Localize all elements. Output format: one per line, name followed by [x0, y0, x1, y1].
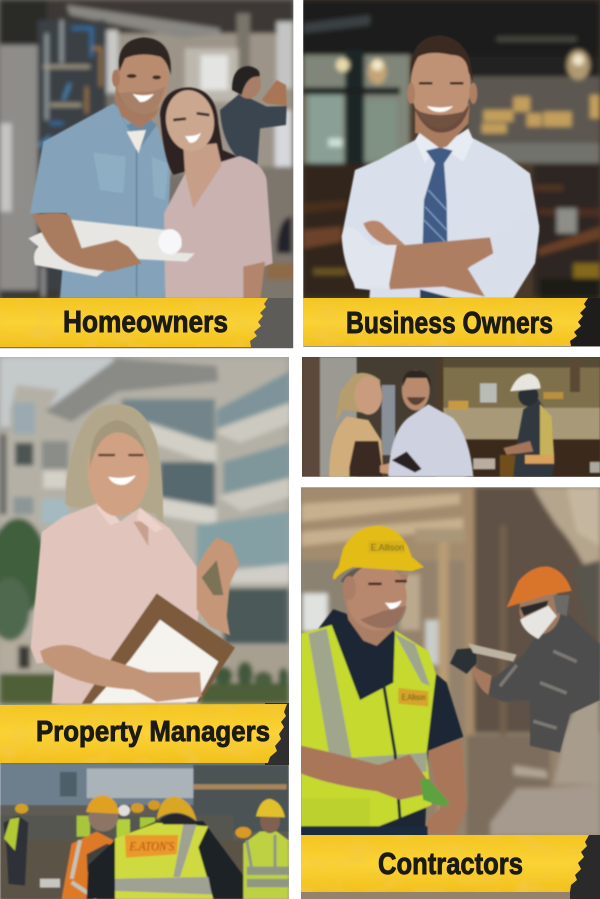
man: [30, 37, 171, 298]
label: business owners: Business Owners: [346, 305, 553, 340]
background worker: [220, 66, 287, 165]
panel backing behind property managers banner: [265, 703, 289, 765]
woman: [160, 87, 273, 298]
yellow tape shape: [0, 298, 268, 347]
panel: restaurant consultation photo: [302, 357, 600, 478]
workshop background: [0, 0, 293, 300]
apartment building background: [0, 357, 290, 704]
yellow tape shape: [303, 298, 588, 346]
panel: homeowners photo: [0, 0, 293, 348]
label: property managers: Property Managers: [36, 716, 270, 748]
restaurant background: [300, 0, 600, 298]
panel backing behind business owners banner: [570, 298, 600, 346]
contractor in yellow helmet and vest: E.Allison: [371, 542, 404, 552]
contractor in yellow helmet and vest: E.Allison: [402, 693, 426, 702]
banner: contractors: [301, 835, 589, 892]
yellow tape shape: [0, 704, 287, 763]
banner: business owners: [303, 298, 588, 346]
restaurant background: [302, 357, 600, 478]
label: homeowners: Homeowners: [63, 304, 228, 339]
masked worker: [450, 566, 600, 753]
waitress: [328, 372, 398, 477]
yellow tape shape: [301, 835, 589, 892]
man's forearm and hand: [32, 213, 142, 272]
property manager: [31, 404, 239, 704]
man in shirt and tie: [342, 35, 539, 298]
panel backing behind homeowners banner: [250, 298, 293, 348]
construction crew scene: E.ATON'S: [128, 839, 174, 854]
building interior background: [301, 487, 600, 837]
banner: property managers: [0, 704, 287, 763]
label: contractors: Contractors: [378, 846, 523, 881]
rolled blueprints: [28, 219, 195, 277]
business owner: [388, 370, 473, 477]
panel: contractors photo: [301, 487, 600, 899]
construction crew scene: [0, 758, 289, 899]
panel backing behind contractors banner: [570, 835, 600, 899]
banner: homeowners: [0, 298, 268, 347]
panel: business owners photo: [300, 0, 600, 347]
contractor in yellow helmet and vest: [301, 526, 467, 837]
panel: property managers photo: [0, 357, 290, 899]
debris pile: [490, 672, 600, 837]
contractor in white hard hat: [503, 373, 555, 477]
